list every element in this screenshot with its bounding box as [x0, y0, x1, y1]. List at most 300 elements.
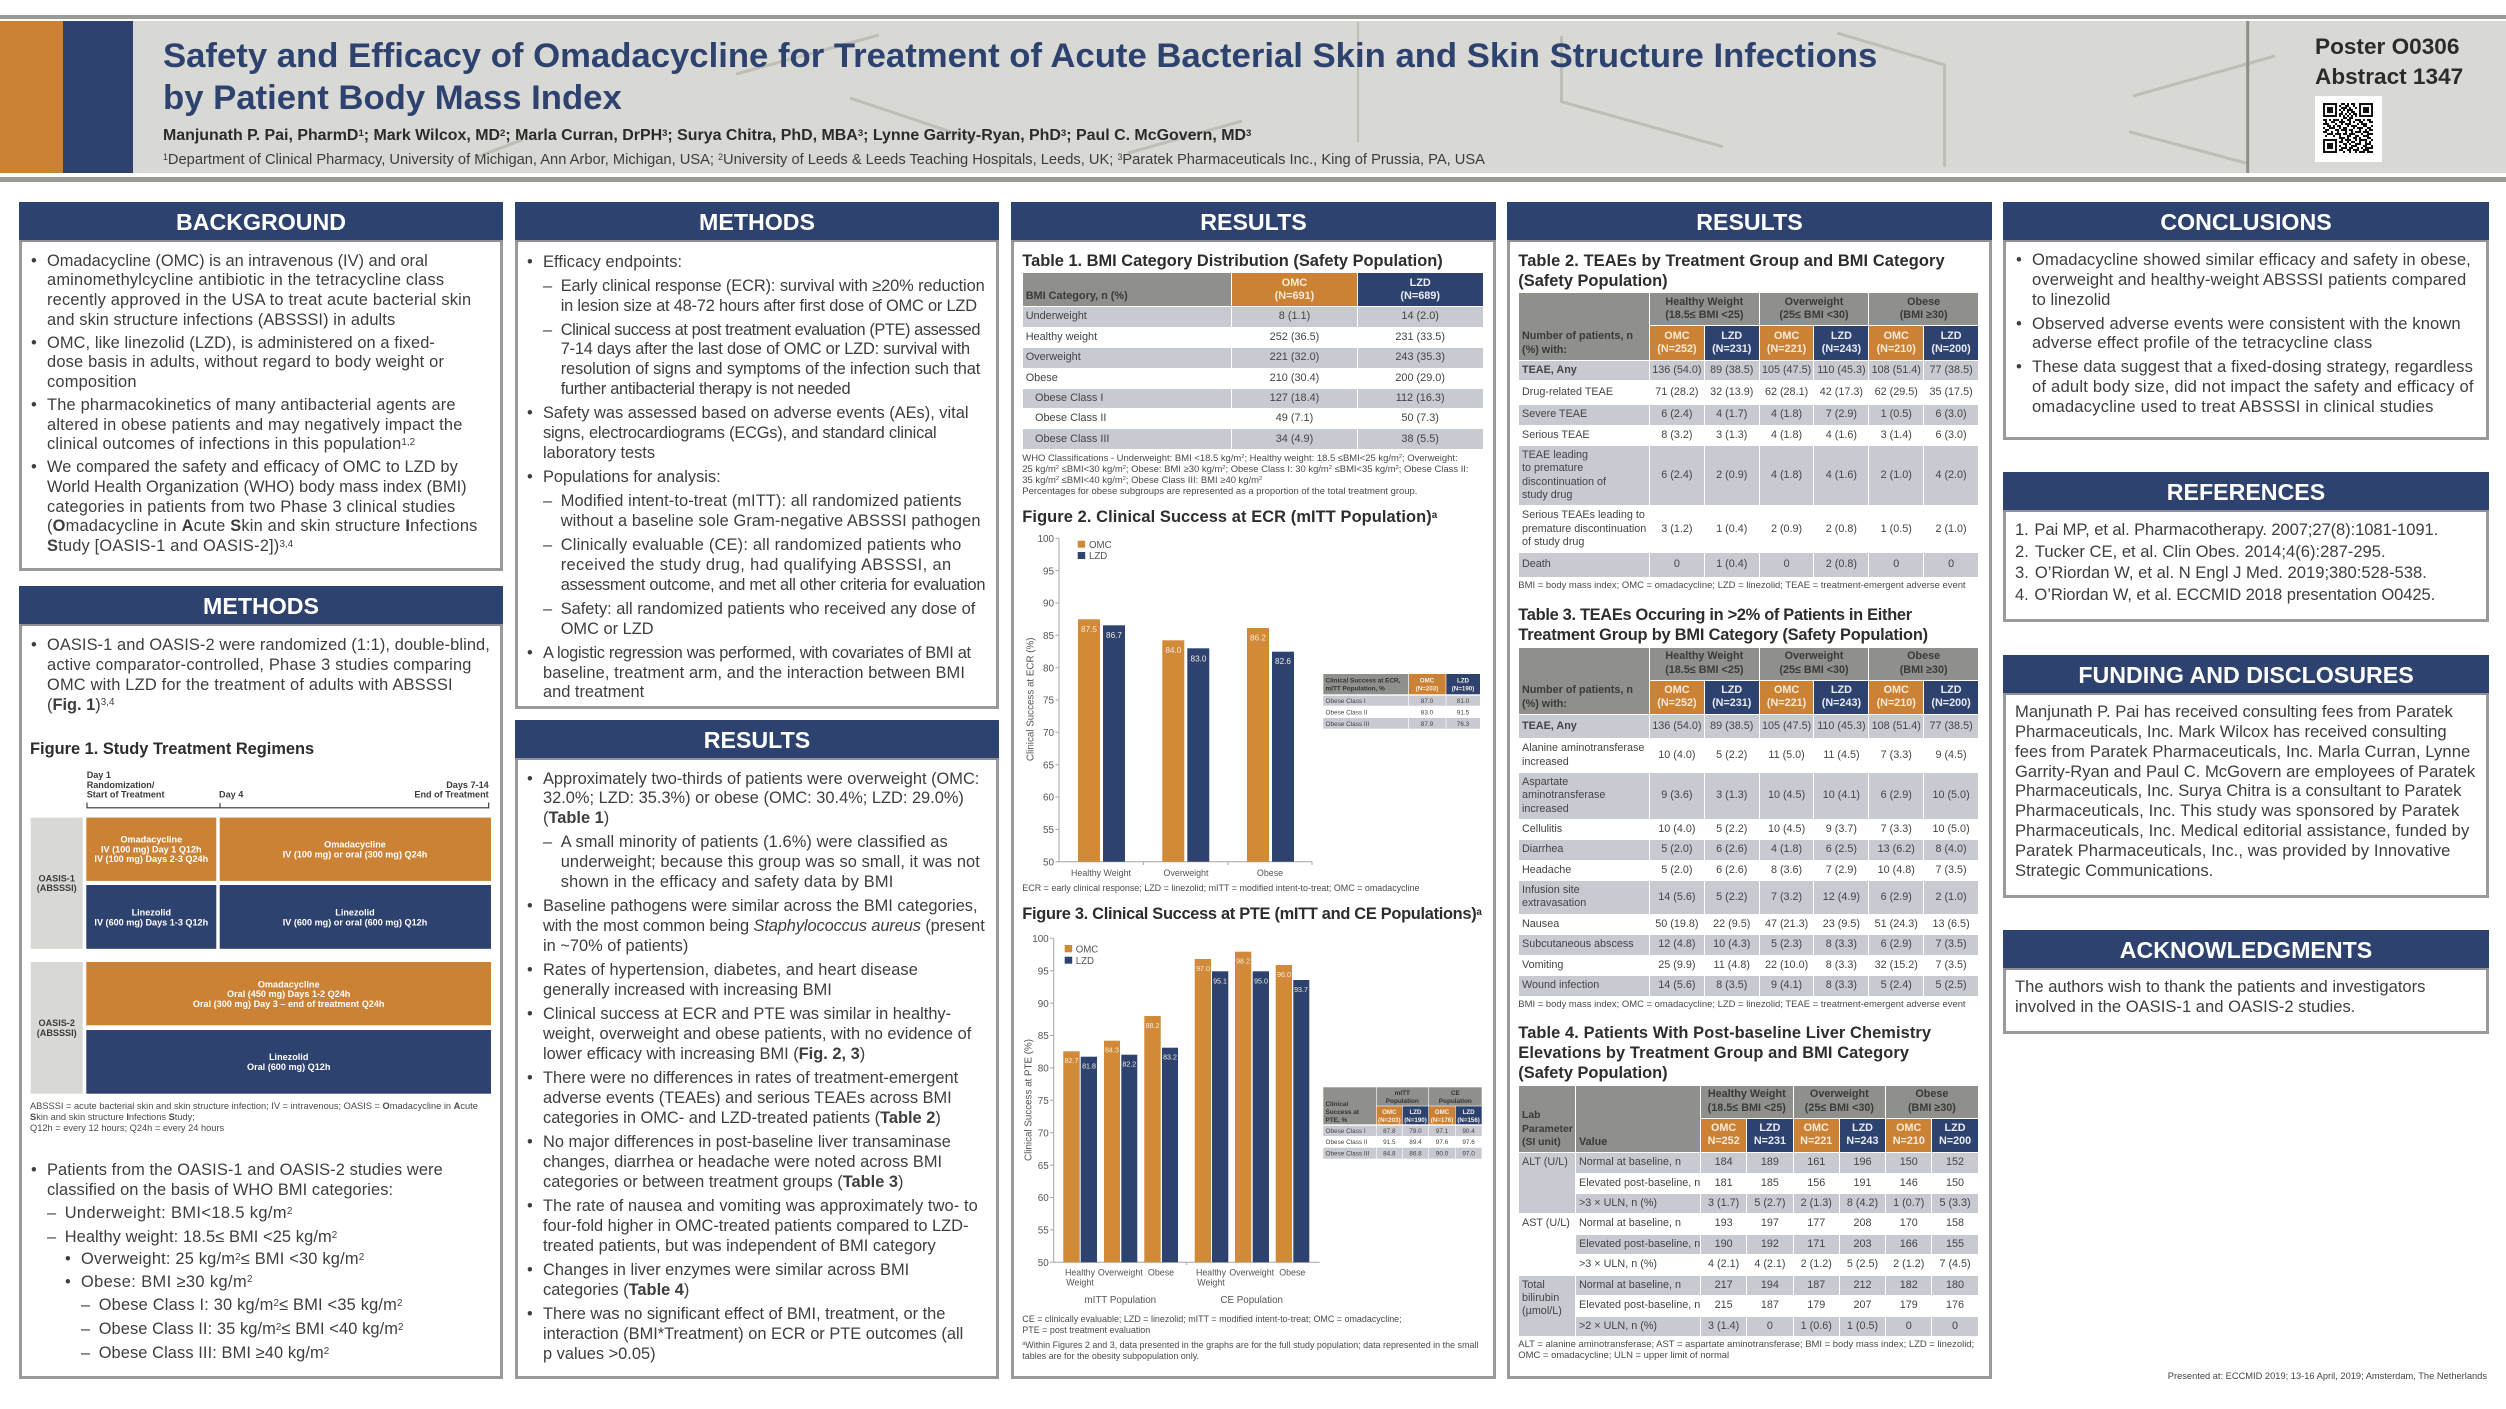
small table: obesity subgroups at ECR: Obese Class II: [1326, 710, 1368, 716]
table 3: TEAEs occurring in more than 2 percent: 136 (54.0): [1652, 720, 1702, 732]
footnote: table 1: WHO Classifications - Underweight: BMI <18.5 kg/m2; Healthy weight: 18.5 ≤BMI<25 kg/m2; Overweight:: [1022, 453, 1458, 464]
table 2: TEAEs by treatment group and BMI: (25≤ BMI <30): [1779, 309, 1849, 321]
table 1: BMI category distribution: 127 (18.4): [1270, 392, 1319, 404]
small table: obesity subgroups at PTE: Obese Class II: [1326, 1139, 1368, 1146]
legend: OMC: [1076, 944, 1098, 955]
table 2: TEAEs by treatment group and BMI: Severe TEAE: [1522, 408, 1587, 420]
text block: results bullets: (Table 1): [543, 809, 609, 827]
legend: [1078, 540, 1112, 562]
legend: LZD: [1076, 956, 1094, 967]
text block: results bullets: No major differences in post-baseline liver transaminase: [543, 1133, 951, 1151]
small table: obesity subgroups at PTE: mITT: [1395, 1090, 1410, 1097]
table 4: liver chemistry elevations: 180: [1946, 1279, 1964, 1291]
table 4: liver chemistry elevations: 4 (2.1): [1708, 1258, 1739, 1270]
heading: table 2: Table 2. TEAEs by Treatment Group and BMI Category: [1518, 252, 1945, 270]
text block: background bullets: categories in patients from two Phase 3 clinical studies: [47, 498, 455, 516]
text block: background bullets: composition: [47, 373, 137, 391]
table 3: TEAEs occurring in more than 2 percent: (25≤ BMI <30): [1779, 664, 1849, 676]
panel: references: [2003, 472, 2489, 622]
chart: study treatment regimens diagram: Randomization/: [87, 780, 155, 790]
table 3: TEAEs occurring in more than 2 percent: 7 (3.5): [1935, 959, 1967, 971]
category labels: Weight: [1066, 1277, 1094, 1287]
table 2: TEAEs by treatment group and BMI: 4 (1.7): [1716, 408, 1747, 420]
small table: obesity subgroups at PTE: 97.1: [1436, 1128, 1449, 1135]
table 2: TEAEs by treatment group and BMI: 6 (2.4): [1661, 469, 1693, 481]
table 4: liver chemistry elevations: (BMI ≥30): [1908, 1102, 1956, 1114]
table 4: liver chemistry elevations: 185: [1761, 1177, 1779, 1189]
poster and abstract numbers: Abstract 1347: [2315, 64, 2463, 88]
footnote: table 1: 35 kg/m2 ≤BMI<40 kg/m2; Obese Class III: BMI ≥40 kg/m2: [1022, 475, 1262, 486]
table 4: liver chemistry elevations: 212: [1853, 1279, 1871, 1291]
table 3: TEAEs occurring in more than 2 percent: LZD: [1721, 684, 1742, 696]
table 3: TEAEs occurring in more than 2 percent: Cellulitis: [1522, 823, 1562, 835]
text block: endpoints and populations: Safety was assessed based on adverse events (AEs), vital: [543, 404, 968, 422]
text block: conclusions bullets: Observed adverse events were consistent with the known: [2032, 314, 2461, 333]
table 3: TEAEs occurring in more than 2 percent: 7 (3.3): [1881, 749, 1912, 761]
y axis with ticks: Clinical Success at PTE (%): [1024, 1039, 1034, 1161]
table 4: liver chemistry elevations: 8 (4.2): [1847, 1197, 1878, 1209]
text block: endpoints and populations: OMC or LZD: [561, 620, 654, 638]
table 2: TEAEs by treatment group and BMI: Number of patients, n: [1522, 330, 1633, 342]
table 2: TEAEs by treatment group and BMI: (18.5≤ BMI <25): [1665, 309, 1743, 321]
table 2: TEAEs by treatment group and BMI: of study drug: [1522, 536, 1584, 548]
bars: 97.0: [1196, 965, 1210, 973]
text block: endpoints and populations: Early clinical response (ECR): survival with ≥20% reduction: [561, 277, 985, 295]
small table: obesity subgroups at PTE: (N=176): [1431, 1117, 1453, 1124]
table 3: TEAEs occurring in more than 2 percent: 5 (2.5): [1935, 979, 1967, 991]
table 3: TEAEs occurring in more than 2 percent: 10 (4.5): [1768, 789, 1805, 801]
footnote: table 1: [1022, 453, 1469, 497]
table 2: TEAEs by treatment group and BMI: 3 (1.3): [1716, 429, 1747, 441]
text block: background bullets: dose basis in adults, without regard to body weight or: [47, 353, 444, 371]
bars: 95.0: [1254, 978, 1268, 986]
text block: background bullets: World Health Organization (WHO) body mass index (BMI): [47, 478, 467, 496]
table 4: liver chemistry elevations: ALT (U/L): [1522, 1156, 1568, 1168]
poster header banner: [0, 15, 2506, 182]
table 4: liver chemistry elevations: 5 (2.7): [1754, 1197, 1786, 1209]
table 3: TEAEs occurring in more than 2 percent: 25 (9.9): [1658, 959, 1696, 971]
y axis with ticks: 85: [1038, 1031, 1049, 1042]
text block: disclosures: Pharmaceuticals, Inc. Surya Chitra is a consultant to Paratek: [2015, 781, 2461, 800]
heading: table 3: Treatment Group by BMI Category (Safety Population): [1518, 626, 1928, 644]
table 2: TEAEs by treatment group and BMI: OMC: [1774, 330, 1799, 342]
text block: disclosures: Garrity-Ryan and Paul C. McGovern are employees of Paratek: [2015, 762, 2475, 781]
small table: obesity subgroups at PTE: OMC: [1435, 1109, 1450, 1116]
heading: table 3: [1518, 606, 1928, 644]
y axis with ticks: 100: [1032, 934, 1049, 945]
table 4: liver chemistry elevations: 146: [1900, 1177, 1918, 1189]
text block: reference list: 2. Tucker CE, et al. Clin Obes. 2014;4(6):287-295.: [2015, 542, 2386, 561]
small table: obesity subgroups at PTE: 97.6: [1462, 1139, 1475, 1146]
table 2: TEAEs by treatment group and BMI: 105 (47.5): [1762, 364, 1811, 376]
table 4: liver chemistry elevations: Obese: [1915, 1088, 1948, 1100]
text block: background bullets: Study [OASIS-1 and OASIS-2])3,4: [47, 537, 293, 555]
bars: 82.2: [1122, 1060, 1136, 1068]
text block: background bullets: altered in obese patients and may negatively impact the: [47, 416, 463, 434]
chart: study treatment regimens diagram: [30, 770, 491, 1094]
table 2: TEAEs by treatment group and BMI: 42 (17.3): [1820, 386, 1863, 398]
text block: endpoints and populations: Safety: all randomized patients who received any dose of: [561, 600, 975, 618]
text block: endpoints and populations: [528, 253, 985, 701]
table 1: BMI category distribution: 49 (7.1): [1276, 412, 1313, 424]
text block: background bullets: recently approved in the USA to treat acute bacterial skin: [47, 291, 471, 309]
heading: results: [515, 720, 999, 760]
small table: obesity subgroups at PTE: Population: [1386, 1098, 1419, 1105]
y axis with ticks: 50: [1043, 857, 1055, 868]
bars: 83.2: [1163, 1054, 1177, 1062]
table 3: TEAEs occurring in more than 2 percent: 7 (3.5): [1935, 864, 1967, 876]
heading: methods: [515, 202, 999, 242]
panel: acknowledgments: [2003, 930, 2489, 1034]
small table: obesity subgroups at PTE: 97.6: [1436, 1139, 1449, 1146]
heading: results: [1507, 202, 1992, 242]
table 3: TEAEs occurring in more than 2 percent: 10 (4.8): [1878, 864, 1915, 876]
table 4: liver chemistry elevations: (SI unit): [1522, 1137, 1561, 1148]
table 3: TEAEs occurring in more than 2 percent: (N=243): [1822, 697, 1861, 709]
table 2: TEAEs by treatment group and BMI: 0: [1784, 558, 1790, 570]
table 4: liver chemistry elevations: 2 (1.2): [1801, 1258, 1832, 1270]
table 2: TEAEs by treatment group and BMI: 2 (1.0): [1881, 469, 1912, 481]
table 1: BMI category distribution: Underweight: [1026, 310, 1087, 322]
text block: endpoints and populations: Clinical success at post treatment evaluation (PTE) assessed: [561, 320, 980, 338]
table 4: liver chemistry elevations: 150: [1900, 1156, 1918, 1168]
table 4: liver chemistry elevations: Total: [1522, 1279, 1545, 1291]
text block: results bullets: categories in OMC- and LZD-treated patients (Table 2): [543, 1109, 941, 1127]
table 3: TEAEs occurring in more than 2 percent: 7 (3.5): [1935, 938, 1967, 950]
text block: results bullets: adverse events (TEAEs) and serious TEAEs across BMI: [543, 1089, 952, 1107]
chart: study treatment regimens diagram: Start of Treatment: [87, 790, 165, 800]
footnote: figure 3: [1022, 1314, 1478, 1361]
y axis with ticks: 65: [1043, 760, 1055, 771]
table 2: TEAEs by treatment group and BMI: (%) with:: [1522, 344, 1567, 356]
table 2: TEAEs by treatment group and BMI: Healthy Weight: [1665, 296, 1743, 308]
table 2: TEAEs by treatment group and BMI: 1 (0.5): [1881, 523, 1912, 535]
heading: results: RESULTS: [1200, 209, 1307, 235]
table 2: TEAEs by treatment group and BMI: 4 (1.8): [1771, 469, 1802, 481]
table 2: TEAEs by treatment group and BMI: 62 (29.5): [1875, 386, 1918, 398]
chart: study treatment regimens diagram: End of Treatment: [414, 790, 489, 800]
text block: disclosures: [2015, 702, 2476, 880]
text block: results bullets: weight, overweight and obese patients, with no evidence of: [543, 1025, 971, 1043]
table 3: TEAEs occurring in more than 2 percent: 8 (3.3): [1826, 959, 1857, 971]
table 4: liver chemistry elevations: 187: [1807, 1279, 1825, 1291]
text block: background bullets: clinical outcomes of infections in this population1,2: [47, 435, 415, 453]
table 3: TEAEs occurring in more than 2 percent: 6 (2.9): [1881, 891, 1912, 903]
text block: disclosures: Manjunath P. Pai has received consulting fees from Paratek: [2015, 702, 2453, 721]
table 3: TEAEs occurring in more than 2 percent: increased: [1522, 756, 1569, 768]
table 4: liver chemistry elevations: 193: [1715, 1217, 1733, 1229]
table 2: TEAEs by treatment group and BMI: 4 (2.0): [1935, 469, 1967, 481]
text block: endpoints and populations: Clinically evaluable (CE): all randomized patients who: [561, 536, 961, 554]
text block: results bullets: Rates of hypertension, diabetes, and heart disease: [543, 961, 918, 979]
OASIS-1 arm group: Omadacycline: [120, 835, 182, 845]
table 4: liver chemistry elevations: 5 (2.5): [1847, 1258, 1878, 1270]
text block: conclusions bullets: Omadacycline showed similar efficacy and safety in obese,: [2032, 250, 2471, 269]
text block: background bullets: (Omadacycline in Acute Skin and skin structure Infections: [47, 517, 478, 535]
bars: 98.2: [1236, 958, 1250, 966]
bars: 84.0: [1165, 646, 1182, 655]
text block: results bullets: 32.0%; LZD: 35.3%) or obese (OMC: 30.4%; LZD: 29.0%): [543, 789, 964, 807]
y axis with ticks: 65: [1038, 1161, 1049, 1172]
table 3: TEAEs occurring in more than 2 percent: 5 (2.4): [1881, 979, 1912, 991]
table 3: TEAEs occurring in more than 2 percent: Nausea: [1522, 918, 1559, 930]
table 4: liver chemistry elevations: 2 (1.3): [1801, 1197, 1832, 1209]
table 2: TEAEs by treatment group and BMI: 1 (0.5): [1881, 408, 1912, 420]
table 4: liver chemistry elevations: OMC: [1711, 1122, 1736, 1134]
table 2: TEAEs by treatment group and BMI: (N=243): [1822, 343, 1861, 355]
table 3: TEAEs occurring in more than 2 percent: 9 (3.6): [1661, 789, 1693, 801]
table 1: BMI category distribution: Healthy weight: [1026, 331, 1097, 343]
bars: 84.3: [1105, 1046, 1119, 1054]
text block: disclosures: fees from Paratek Pharmaceuticals, Inc. Marla Curran, Lynne: [2015, 742, 2470, 761]
small table: obesity subgroups at PTE: CE: [1451, 1090, 1460, 1097]
heading: references: [2003, 472, 2489, 512]
small table: obesity subgroups at ECR: (N=190): [1452, 686, 1474, 692]
heading: table 4: [1518, 1024, 1931, 1082]
table 4: liver chemistry elevations: 217: [1715, 1279, 1733, 1291]
text block: results bullets: There were no differences in rates of treatment-emergent: [543, 1069, 958, 1087]
table 4: liver chemistry elevations: Parameter: [1522, 1124, 1573, 1135]
bars: 86.2: [1250, 634, 1266, 643]
text block: endpoints and populations: assessment outcome, and met all other criteria for evaluation: [561, 576, 985, 594]
footnote: table 4: ALT = alanine aminotransferase; AST = aspartate aminotransferase; BMI = body mass index; LZD = linezolid;: [1518, 1339, 1974, 1350]
table 2: TEAEs by treatment group and BMI: 2 (0.8): [1826, 558, 1857, 570]
bars: 88.2: [1146, 1022, 1159, 1030]
table 3: TEAEs occurring in more than 2 percent: 7 (3.3): [1881, 823, 1912, 835]
footnote: table 1: 25 kg/m2 ≤BMI<30 kg/m2; Obese: BMI ≥30 kg/m2; Obese Class I: 30 kg/m2 ≤BMI<35 kg/m2; Obese Class II:: [1022, 464, 1469, 475]
panel: methods column 2: [515, 202, 999, 709]
heading: table 4: (Safety Population): [1518, 1064, 1668, 1082]
table 3: TEAEs occurring in more than 2 percent: 22 (10.0): [1765, 959, 1808, 971]
small table: obesity subgroups at PTE: OMC: [1382, 1109, 1397, 1116]
table 3: TEAEs occurring in more than 2 percent: LZD: [1941, 684, 1962, 696]
table 3: TEAEs occurring in more than 2 percent: Overweight: [1785, 650, 1843, 662]
table 3: TEAEs occurring in more than 2 percent: 10 (4.0): [1658, 823, 1696, 835]
small table: obesity subgroups at PTE: LZD: [1409, 1109, 1422, 1116]
table 2: TEAEs by treatment group and BMI: 6 (2.4): [1661, 408, 1693, 420]
poster and abstract numbers: [2315, 34, 2463, 88]
text block: results bullets: four-fold higher in OMC-treated patients compared to LZD-: [543, 1217, 968, 1235]
table 1: BMI category distribution: 221 (32.0): [1270, 351, 1319, 363]
text block: disclosures: Pharmaceuticals, Inc. Mark Wilcox has received consulting: [2015, 722, 2447, 741]
table 2: TEAEs by treatment group and BMI: 62 (28.1): [1765, 386, 1808, 398]
table 4: liver chemistry elevations: 177: [1807, 1217, 1825, 1229]
legend: [1065, 944, 1098, 967]
table 3: TEAEs occurring in more than 2 percent: 7 (3.2): [1771, 891, 1802, 903]
text block: endpoints and populations: A logistic regression was performed, with covariates of BMI at: [543, 644, 971, 662]
bars: 87.5: [1081, 625, 1097, 634]
table 1: BMI category distribution: OMC: [1282, 277, 1307, 289]
table 2: TEAEs by treatment group and BMI: 3 (1.2): [1661, 523, 1693, 535]
text block: background bullets: aminomethylcycline antibiotic in the tetracycline class: [47, 271, 444, 289]
small table: obesity subgroups at PTE: (N=190): [1404, 1117, 1427, 1124]
small table: obesity subgroups at PTE: (N=203): [1378, 1117, 1401, 1124]
table 4: liver chemistry elevations: 215: [1715, 1299, 1733, 1311]
table 2: TEAEs by treatment group and BMI: 32 (13.9): [1710, 386, 1753, 398]
table 2: TEAEs by treatment group and BMI: 0: [1893, 558, 1899, 570]
text block: conclusions bullets: [2016, 250, 2474, 416]
text block: results bullets: Approximately two-thirds of patients were overweight (OMC:: [543, 770, 979, 788]
text block: results bullets: with the most common being Staphylococcus aureus (present: [543, 917, 985, 935]
table 3: TEAEs occurring in more than 2 percent: (BMI ≥30): [1900, 664, 1948, 676]
table 3: TEAEs occurring in more than 2 percent: (N=252): [1657, 697, 1697, 709]
small table: obesity subgroups at ECR: OMC: [1420, 678, 1435, 684]
category labels: [1065, 1267, 1305, 1306]
table 4: liver chemistry elevations: 203: [1853, 1238, 1871, 1250]
table 2: TEAEs by treatment group and BMI: OMC: [1664, 330, 1690, 342]
table 3: TEAEs occurring in more than 2 percent: 6 (2.5): [1826, 843, 1857, 855]
y axis with ticks: 85: [1043, 631, 1055, 642]
text block: results bullets: interaction (BMI*Treatment) on ECR or PTE outcomes (all: [543, 1325, 963, 1343]
small table: obesity subgroups at PTE: 91.5: [1383, 1139, 1396, 1146]
table 3: TEAEs occurring in more than 2 percent: 5 (2.2): [1716, 823, 1747, 835]
text block: endpoints and populations: received the study drug, had qualifying ABSSSI, an: [561, 556, 952, 574]
text block: endpoints and populations: Efficacy endpoints:: [543, 253, 682, 271]
table 3: TEAEs occurring in more than 2 percent: (N=231): [1712, 697, 1751, 709]
table 3: TEAEs occurring in more than 2 percent: 6 (2.9): [1881, 789, 1912, 801]
small table: obesity subgroups at ECR: (N=203): [1416, 686, 1438, 692]
table 2: TEAEs by treatment group and BMI: 0: [1948, 558, 1954, 570]
text block: conclusions bullets: overweight and healthy-weight ABSSSI patients compared: [2032, 270, 2466, 289]
text block: conclusions bullets: of adult body size, did not impact the safety and efficacy of: [2032, 377, 2474, 396]
table 3: TEAEs occurring in more than 2 percent: 23 (9.5): [1823, 918, 1860, 930]
heading: results: RESULTS: [704, 727, 810, 753]
footnote: table 1: Percentages for obese subgroups are represented as a proportion of the total treatment group.: [1022, 486, 1417, 497]
heading: references: REFERENCES: [2167, 478, 2325, 504]
text block: results bullets: [528, 770, 985, 1363]
panel: results column 3: [1011, 202, 1496, 1379]
text block: background bullets: and skin structure infections (ABSSSI) in adults: [47, 311, 395, 329]
table 3: TEAEs occurring in more than 2 percent: 89 (38.5): [1710, 720, 1753, 732]
text block: results bullets: Baseline pathogens were similar across the BMI categories,: [543, 897, 978, 915]
footnote: figure 3: aWithin Figures 2 and 3, data presented in the graphs are for the full study population; data represented in the small: [1022, 1340, 1478, 1350]
heading: funding and disclosures: FUNDING AND DISCLOSURES: [2078, 662, 2414, 688]
table 1: BMI category distribution: 200 (29.0): [1395, 372, 1445, 384]
table 2: TEAEs by treatment group and BMI: (N=210): [1877, 343, 1916, 355]
table 4: liver chemistry elevations: 158: [1946, 1217, 1964, 1229]
text block: endpoints and populations: and treatment: [543, 683, 644, 701]
text block: WHO BMI categories: Overweight: 25 kg/m2≤ BMI <30 kg/m2: [81, 1250, 364, 1268]
chart: study treatment regimens diagram: Day 4: [219, 790, 244, 800]
small table: obesity subgroups at PTE: 86.8: [1409, 1151, 1422, 1158]
heading: results: RESULTS: [1696, 209, 1803, 235]
footnote: table 2: BMI = body mass index; OMC = omadacycline; LZD = linezolid; TEAE = treatment-emergent adverse event: [1518, 580, 1966, 591]
OASIS-1 arm group: IV (100 mg) or oral (300 mg) Q24h: [283, 850, 427, 860]
table 1: BMI category distribution: 8 (1.1): [1279, 310, 1310, 322]
footnote: table 4: [1518, 1339, 1974, 1361]
table 4: liver chemistry elevations: OMC: [1804, 1122, 1829, 1134]
heading: conclusions: CONCLUSIONS: [2160, 209, 2332, 235]
table 4: liver chemistry elevations: 179: [1900, 1299, 1918, 1311]
text block: WHO BMI categories: Healthy weight: 18.5≤ BMI <25 kg/m2: [65, 1228, 337, 1246]
text block: disclosures: Pharmaceuticals, Inc. Medical editorial assistance, funded by: [2015, 821, 2469, 840]
table 3: TEAEs occurring in more than 2 percent: 11 (4.8): [1714, 959, 1750, 971]
table 4: liver chemistry elevations: 1 (0.6): [1801, 1320, 1832, 1332]
table 2: TEAEs by treatment group and BMI: OMC: [1884, 330, 1909, 342]
table 4: liver chemistry elevations: Elevated post-baseline, n: [1579, 1177, 1700, 1189]
table 2: TEAEs by treatment group and BMI: 2 (0.8): [1826, 523, 1857, 535]
small table: obesity subgroups at ECR: 81.0: [1457, 698, 1470, 705]
text block: conclusions bullets: adverse effect profile of the tetracycline class: [2032, 333, 2372, 352]
text block: disclosures: Paratek Pharmaceuticals, Inc., was provided by Innovative: [2015, 841, 2451, 860]
text block: background bullets: We compared the safety and efficacy of OMC to LZD by: [47, 458, 458, 476]
table 2: TEAEs by treatment group and BMI: discontinuation of: [1522, 476, 1606, 488]
table 4: liver chemistry elevations: Elevated post-baseline, n: [1579, 1299, 1700, 1311]
table 4: liver chemistry elevations: 197: [1761, 1217, 1779, 1229]
affiliations: 1Department of Clinical Pharmacy, University of Michigan, Ann Arbor, Michigan, USA; 2University of Leeds & Leeds Teaching Hospitals, Leeds, UK; 3Paratek Pharmaceuticals Inc., King of Prussia, PA, USA: [163, 152, 1485, 168]
y axis with ticks: 80: [1038, 1064, 1049, 1075]
footnote: table 4: OMC = omadacycline; ULN = upper limit of normal: [1518, 1350, 1729, 1361]
table 4: liver chemistry elevations: Elevated post-baseline, n: [1579, 1238, 1700, 1250]
table 1: BMI category distribution: 14 (2.0): [1401, 310, 1439, 322]
table 3: TEAEs occurring in more than 2 percent: Obese: [1907, 650, 1940, 662]
table 4: liver chemistry elevations: 156: [1807, 1177, 1825, 1189]
table 4: liver chemistry elevations: bilirubin: [1522, 1292, 1559, 1304]
category labels: [1071, 868, 1283, 878]
small table: obesity subgroups at PTE: Clinical: [1326, 1101, 1348, 1108]
OASIS-1 arm group: IV (600 mg) or oral (600 mg) Q12h: [283, 918, 427, 928]
small table: obesity subgroups at PTE: PTE, %: [1326, 1117, 1347, 1124]
category labels: Overweight: [1098, 1267, 1143, 1277]
small table: obesity subgroups at PTE: 79.0: [1409, 1128, 1422, 1135]
text block: results bullets: Clinical success at ECR and PTE was similar in healthy-: [543, 1005, 951, 1023]
table 1: BMI category distribution: LZD: [1410, 277, 1431, 289]
OASIS-1 arm group: [31, 818, 491, 949]
table 4: liver chemistry elevations: LZD: [1945, 1122, 1966, 1134]
table 3: TEAEs occurring in more than 2 percent: Aspartate: [1522, 776, 1568, 788]
heading: figure 1: Figure 1. Study Treatment Regimens: [30, 740, 314, 758]
table 2: TEAEs by treatment group and BMI: 108 (51.4): [1872, 364, 1921, 376]
OASIS-1 arm group: Omadacycline: [324, 840, 386, 850]
heading: figure 2: Figure 2. Clinical Success at ECR (mITT Population)a: [1022, 508, 1437, 526]
table 4: liver chemistry elevations: 184: [1715, 1156, 1733, 1168]
heading: table 4: Elevations by Treatment Group and BMI Category: [1518, 1044, 1909, 1062]
table 3: TEAEs occurring in more than 2 percent: 9 (4.1): [1771, 979, 1802, 991]
table 3: TEAEs occurring in more than 2 percent: 8 (3.3): [1826, 979, 1857, 991]
table 3: TEAEs occurring in more than 2 percent: 10 (4.5): [1768, 823, 1805, 835]
small table: obesity subgroups at PTE: 84.8: [1383, 1151, 1396, 1158]
OASIS-1 arm group: Linezolid: [132, 908, 171, 918]
y axis with ticks: 55: [1043, 825, 1055, 836]
text block: WHO BMI categories: [32, 1161, 443, 1362]
y axis with ticks: Clinical Success at ECR (%): [1026, 638, 1036, 761]
table 4: liver chemistry elevations: (18.5≤ BMI <25): [1708, 1102, 1786, 1114]
y axis with ticks: 100: [1038, 534, 1054, 545]
table 3: TEAEs occurring in more than 2 percent: 8 (3.3): [1826, 938, 1857, 950]
category labels: mITT Population: [1084, 1295, 1156, 1306]
panel: results column 4: [1507, 202, 1992, 1379]
table 2: TEAEs by treatment group and BMI: 6 (3.0): [1935, 408, 1967, 420]
text block: WHO BMI categories: Obese Class II: 35 kg/m2≤ BMI <40 kg/m2: [99, 1320, 403, 1338]
table 2: TEAEs by treatment group and BMI: 4 (1.8): [1771, 429, 1802, 441]
footnote: figure 1 abbreviations: [30, 1101, 478, 1133]
small table: obesity subgroups at PTE: 89.4: [1409, 1139, 1422, 1146]
text block: endpoints and populations: 7-14 days after the last dose of OMC or LZD: survival with: [561, 340, 970, 358]
panel: results column 2: [515, 720, 999, 1379]
footnote: figure 1 abbreviations: ABSSSI = acute bacterial skin and skin structure infection; IV = intravenous; OASIS = Omadacycline in Acute: [30, 1101, 478, 1111]
footnote: figure 3: PTE = post treatment evaluation: [1022, 1325, 1150, 1335]
authors: Manjunath P. Pai, PharmD1; Mark Wilcox, MD2; Marla Curran, DrPH3; Surya Chitra, PhD, MBA3; Lynne Garrity-Ryan, PhD3; Paul C. McGovern, MD3: [163, 127, 1251, 144]
table 4: liver chemistry elevations: >3 × ULN, n (%): [1579, 1258, 1657, 1270]
y axis with ticks: 70: [1038, 1128, 1049, 1139]
OASIS-2 arm group: (ABSSSI): [37, 1028, 77, 1038]
table 2: TEAEs by treatment group and BMI: 4 (1.6): [1826, 469, 1857, 481]
table 4: liver chemistry elevations: AST (U/L): [1522, 1217, 1570, 1229]
table 2: TEAEs by treatment group and BMI: 2 (0.9): [1771, 523, 1802, 535]
table 3: TEAEs occurring in more than 2 percent: 14 (5.6): [1658, 891, 1696, 903]
OASIS-1 arm group: OASIS-1: [39, 874, 75, 884]
OASIS-1 arm group: Linezolid: [335, 908, 375, 918]
